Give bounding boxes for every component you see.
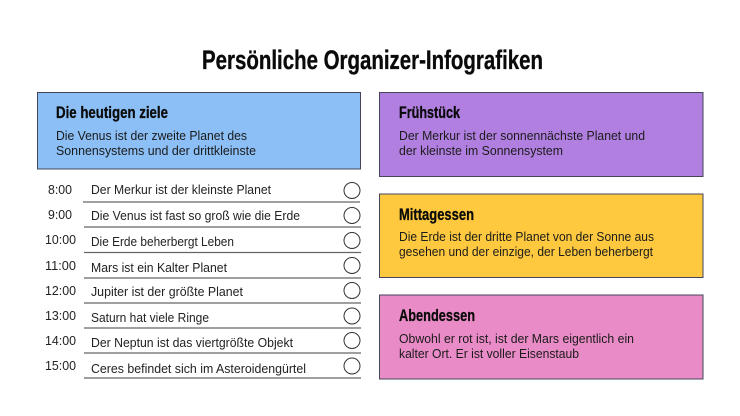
text block: today's goals: Die Venus ist der zweite Planet des (56, 128, 247, 143)
row 12:00: Jupiter ist der größte Planet (91, 284, 243, 299)
row 9:00: Die Venus ist fast so groß wie die Erde (91, 208, 300, 223)
row 8:00 (48, 182, 360, 202)
text block: dinner: kalter Ort. Er ist voller Eisenstaub (399, 346, 579, 361)
row 8:00: Der Merkur ist der kleinste Planet (91, 182, 271, 197)
heading: today's goals: Die heutigen ziele (56, 103, 168, 122)
row 13:00: Saturn hat viele Ringe (91, 310, 209, 325)
row 13:00: 13:00 (45, 308, 76, 323)
row 10:00 (45, 232, 361, 252)
row 12:00: 12:00 (45, 283, 76, 298)
heading: breakfast: Frühstück (399, 103, 460, 122)
row 14:00: Der Neptun ist das viertgrößte Objekt (91, 335, 293, 350)
row 12:00 (45, 282, 361, 303)
text block: lunch: gesehen und der einzige, der Leben beherbergt (399, 244, 653, 259)
title: Persönliche Organizer-Infografiken (202, 45, 543, 75)
row 10:00: Die Erde beherbergt Leben (91, 234, 234, 249)
panel: today's goals (38, 92, 360, 169)
heading: lunch: Mittagessen (399, 205, 474, 224)
text block: breakfast: der kleinste im Sonnensystem (399, 143, 563, 158)
row 15:00: 15:00 (45, 358, 76, 373)
row 14:00 (45, 332, 361, 353)
row 14:00: 14:00 (45, 333, 76, 348)
row 13:00 (45, 308, 361, 328)
row 9:00: 9:00 (48, 207, 72, 222)
panel: dinner (380, 295, 703, 379)
text block: breakfast: Der Merkur ist der sonnennächste Planet und (399, 128, 645, 143)
panel: lunch (380, 194, 703, 278)
row 8:00: 8:00 (48, 182, 72, 197)
row 10:00: 10:00 (45, 232, 76, 247)
text block: dinner: Obwohl er rot ist, ist der Mars eigentlich ein (399, 331, 634, 346)
text block: dinner (399, 331, 634, 361)
text block: breakfast (399, 128, 645, 158)
row 15:00 (45, 358, 361, 378)
text block: lunch: Die Erde ist der dritte Planet von der Sonne aus (399, 229, 654, 244)
row 11:00: Mars ist ein Kalter Planet (91, 260, 227, 275)
row 15:00: Ceres befindet sich im Asteroidengürtel (91, 361, 306, 376)
row 11:00 (45, 258, 361, 278)
text block: lunch (399, 229, 654, 259)
row 9:00 (48, 207, 361, 227)
text block: today's goals: Sonnensystems und der drittkleinste (56, 143, 256, 158)
text block: today's goals (56, 128, 256, 158)
heading: dinner: Abendessen (399, 306, 475, 325)
row 11:00: 11:00 (45, 258, 76, 273)
panel: schedule list (45, 182, 361, 378)
panel: breakfast (380, 92, 703, 176)
